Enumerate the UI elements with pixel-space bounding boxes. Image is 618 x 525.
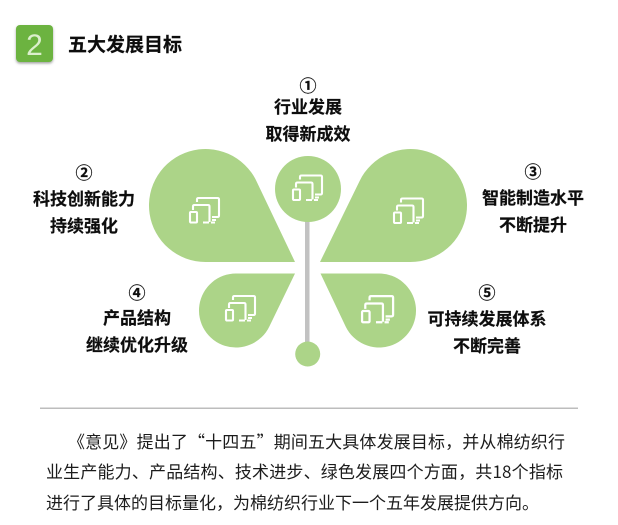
petal: upper right: [320, 149, 467, 262]
body paragraph: 《意见》提出了“十四五”期间五大具体发展目标，并从棉纺织行: [68, 428, 565, 453]
body paragraph: 业生产能力、产品结构、技术进步、绿色发展四个方面，共18个指标: [46, 458, 563, 483]
label 2: 科技创新能力: [33, 185, 135, 210]
icon: devices lower left: [226, 296, 255, 320]
label 1: ①: [300, 72, 316, 97]
label 3: 智能制造水平: [482, 184, 584, 209]
label 5: [428, 279, 546, 357]
label 5: 不断完善: [453, 332, 521, 357]
stem: [305, 218, 310, 348]
petal: lower left: [199, 274, 295, 348]
petal: lower right: [320, 274, 416, 348]
label 3: 不断提升: [499, 211, 567, 236]
label 2: 持续强化: [50, 212, 118, 237]
label 4: ④: [128, 279, 146, 304]
label 4: 产品结构: [103, 304, 171, 329]
icon: devices upper left: [190, 198, 219, 222]
label 1: [266, 72, 350, 145]
icon: devices upper right: [394, 198, 423, 223]
section badge: 2: [26, 29, 43, 62]
label 4: [86, 279, 188, 356]
label 2: ②: [76, 159, 92, 184]
body paragraph: 进行了具体的目标量化，为棉纺织行业下一个五年发展提供方向。: [46, 489, 539, 514]
icon: devices top: [293, 176, 322, 200]
icon: devices lower right: [362, 296, 393, 322]
section badge: [16, 25, 53, 62]
label 3: ③: [524, 158, 542, 183]
stem end circle: [295, 342, 320, 366]
petal: upper left: [149, 149, 295, 262]
label 5: ⑤: [478, 279, 496, 304]
title: 五大发展目标: [68, 30, 182, 57]
label 2: [33, 159, 135, 237]
label 5: 可持续发展体系: [428, 305, 546, 330]
petal: top center circle: [275, 156, 341, 222]
label 3: [482, 158, 584, 236]
butterfly diagram: [149, 149, 467, 366]
label 4: 继续优化升级: [86, 331, 188, 356]
label 1: 取得新成效: [266, 120, 350, 145]
label 1: 行业发展: [274, 93, 342, 118]
body paragraph: [46, 428, 565, 514]
